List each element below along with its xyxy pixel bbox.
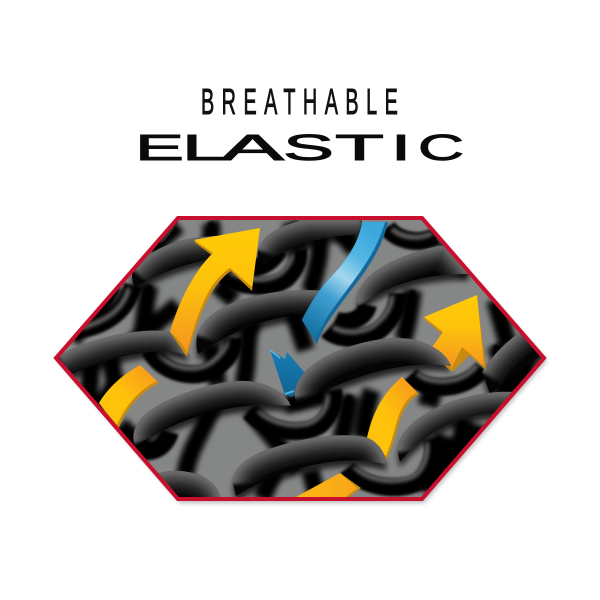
band: lower centre right	[233, 435, 387, 496]
vertical strands	[72, 222, 528, 499]
arrow: large yellow	[170, 228, 260, 357]
title: ELASTIC: C	[418, 127, 464, 168]
arrow: bottom yellow	[296, 473, 361, 497]
band: centre upper	[196, 290, 330, 354]
band: upper left	[132, 236, 216, 286]
title: ELASTIC: I	[391, 127, 411, 168]
hexagon drop shadow	[58, 222, 547, 503]
band: far left	[58, 330, 189, 374]
band: right edge	[482, 332, 540, 393]
band: bottom left	[158, 470, 220, 497]
band: lower centre left	[133, 381, 291, 446]
band shadows	[58, 225, 548, 502]
title: ELASTIC: E	[135, 127, 184, 168]
band: centre	[295, 338, 451, 405]
band: upper right	[357, 245, 470, 306]
title: ELASTIC: L	[182, 127, 225, 168]
fabric background	[50, 215, 550, 505]
blue arrow small head	[270, 350, 305, 397]
band: top left corner	[160, 222, 178, 244]
arrow: lower right yellow	[367, 377, 419, 460]
arrow: right yellow	[424, 295, 486, 372]
band: upper middle	[258, 220, 362, 258]
arrow: blue ribbon	[302, 222, 388, 344]
title: ELASTIC: T	[335, 127, 384, 168]
title: ELASTIC: A	[221, 127, 284, 168]
infographic canvas	[53, 88, 548, 506]
panel: woven fabric hexagon	[50, 215, 550, 505]
title: ELASTIC	[135, 127, 464, 168]
title: ELASTIC: S	[283, 127, 334, 168]
chain rings	[75, 227, 483, 487]
arrow: lower left yellow	[99, 365, 159, 430]
band: lower right	[398, 392, 515, 462]
hexagon red border	[56, 218, 544, 499]
title: BREATHABLE: BREATHABLE	[201, 83, 405, 123]
